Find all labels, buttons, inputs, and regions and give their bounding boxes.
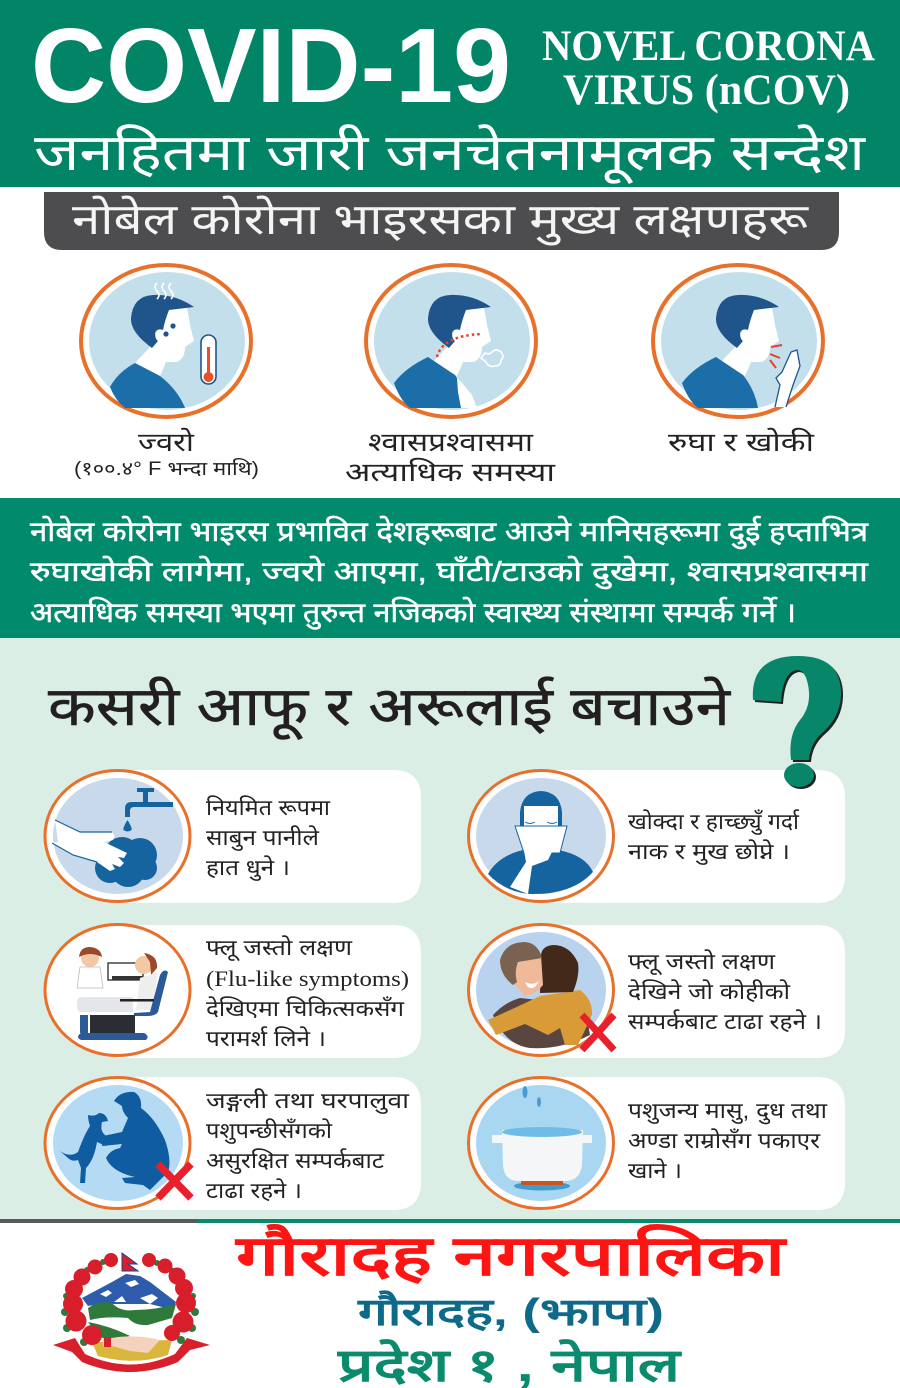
text: परामर्श लिने । <box>206 1026 326 1051</box>
text <box>628 809 800 865</box>
text: पशुपन्छीसँगको <box>206 1118 332 1144</box>
subtitle: Novel Corona Virus <box>542 23 875 114</box>
text: देखिएमा चिकित्सकसँग <box>206 996 405 1021</box>
panel: symptoms <box>74 265 823 487</box>
icon: red cross <box>158 1164 191 1198</box>
text: फ्लू जस्तो लक्षण <box>206 935 353 962</box>
text <box>206 1088 409 1203</box>
icon: question mark <box>753 656 843 789</box>
icon: red cross <box>582 1015 614 1050</box>
icon: fever <box>81 265 251 417</box>
label: breathing difficulty: अत्याधिक समस्या <box>345 457 557 487</box>
icon: covering face <box>468 770 614 902</box>
label: cold and cough: रुघा र खोकी <box>668 427 816 457</box>
panel: advisory message: नोबेल कोरोना भाइरस प्रभावित देशहरूबाट आउने मानिसहरूमा दुई हप्ताभित्र <box>30 515 869 550</box>
text: टाढा रहने । <box>206 1178 302 1203</box>
text: असुरक्षित सम्पर्कबाट <box>206 1148 385 1174</box>
label: breathing difficulty <box>345 427 557 487</box>
panel: footer <box>0 1223 900 1388</box>
text: साबुन पानीले <box>206 825 320 851</box>
panel: header <box>0 0 900 187</box>
text: नाक र मुख छोप्ने । <box>628 839 790 865</box>
heading: municipality: गौरादह नगरपालिका <box>235 1223 788 1287</box>
label: fever: (१००.४° F भन्दा माथि) <box>74 457 259 480</box>
icon: person and dog with cross <box>45 1078 191 1208</box>
text: नियमित रूपमा <box>206 795 330 820</box>
text: अण्डा राम्रोसँग पकाएर <box>628 1128 821 1153</box>
label: breathing difficulty: श्वासप्रश्वासमा <box>368 427 535 457</box>
text: जङ्गली तथा घरपालुवा <box>206 1088 409 1114</box>
text: सम्पर्कबाट टाढा रहने । <box>628 1009 822 1034</box>
text: खाने । <box>628 1158 682 1183</box>
card: cover nose and mouth <box>468 770 845 903</box>
icon: cough <box>653 265 823 417</box>
text: हात धुने । <box>206 855 290 881</box>
panel: advisory message <box>0 498 900 638</box>
text: फ्लू जस्तो लक्षण <box>628 949 776 976</box>
label: fever: ज्वरो <box>138 427 196 457</box>
text <box>206 795 330 881</box>
heading: how to protect: कसरी आफू र अरूलाई बचाउने <box>48 676 731 740</box>
icon: doctor consultation <box>45 924 190 1056</box>
text: देखिने जो कोहीको <box>628 979 790 1004</box>
icon: breathing difficulty <box>366 265 536 417</box>
text: (Flu-like symptoms) <box>206 966 409 991</box>
icon: hugging with cross <box>468 924 614 1056</box>
title: COVID-19: COVID-19 <box>31 7 511 125</box>
panel: advisory message: अत्याधिक समस्या भएमा तुरुन्त नजिकको स्वास्थ्य संस्थामा सम्पर्क गर्ने । <box>30 596 796 630</box>
text <box>628 1098 827 1183</box>
text <box>206 935 409 1051</box>
heading: public awareness message: जनहितमा जारी जनचेतनामूलक सन्देश <box>34 124 867 184</box>
panel: prevention background <box>0 638 900 1219</box>
subtitle: Novel Corona Virus: NOVEL CORONA <box>542 23 875 70</box>
card: wash hands <box>45 770 421 903</box>
divider <box>0 1219 198 1223</box>
icon: cooking pot <box>468 1078 614 1208</box>
card: avoid contact with symptomatic people <box>468 924 845 1058</box>
card: consult doctor <box>45 924 421 1058</box>
subtitle: Novel Corona Virus: VIRUS (nCOV) <box>563 67 850 114</box>
panel: symptoms heading bar <box>44 192 839 250</box>
card: avoid animals <box>45 1077 421 1210</box>
text: खोक्दा र हाच्छ्युँ गर्दा <box>628 809 800 835</box>
text: पशुजन्य मासु, दुध तथा <box>628 1098 827 1125</box>
icon: washing hands <box>45 770 190 902</box>
text: location: गौरादह, (झापा) <box>357 1290 664 1334</box>
panel: symptoms heading bar: नोबेल कोरोना भाइरसका मुख्य लक्षणहरू <box>72 195 810 246</box>
text <box>628 949 822 1034</box>
panel: advisory message: रुघाखोकी लागेमा, ज्वरो आएमा, घाँटी/टाउको दुखेमा, श्वासप्रश्वासमा <box>30 555 869 590</box>
card: cook food well <box>468 1077 845 1210</box>
label: fever <box>74 427 259 480</box>
icon: Nepal emblem <box>53 1253 210 1372</box>
